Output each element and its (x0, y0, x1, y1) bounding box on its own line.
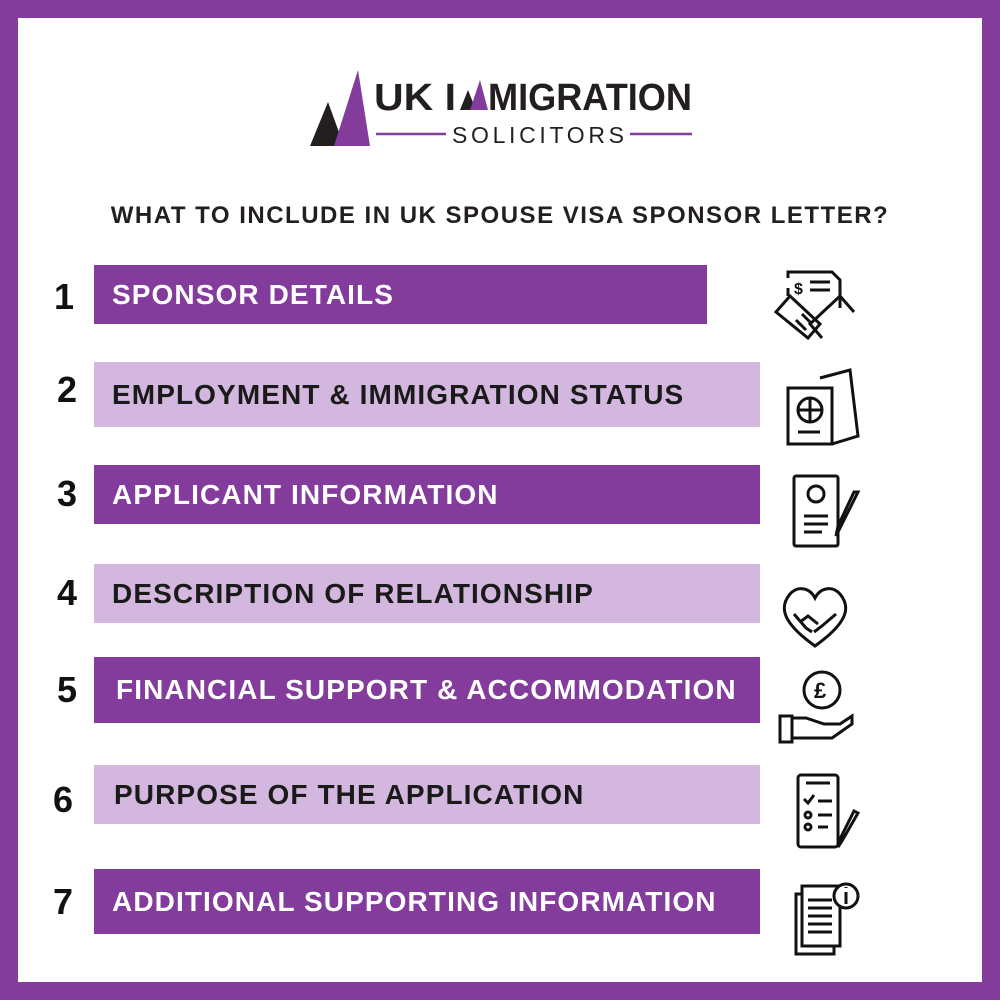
text: ADDITIONAL SUPPORTING INFORMATION (112, 886, 717, 916)
text: 5 (57, 669, 77, 710)
item 5 (57, 657, 760, 723)
icon: hand pound coin (778, 670, 854, 744)
text: APPLICANT INFORMATION (112, 478, 499, 510)
icon: handshake contract: $ (794, 281, 803, 298)
logo: MIGRATION (488, 77, 692, 119)
icon: applicant form (792, 474, 860, 548)
icon: handshake contract (774, 270, 855, 340)
text: EMPLOYMENT & IMMIGRATION STATUS (112, 378, 684, 410)
icon: checklist (796, 774, 860, 848)
item 1 (54, 265, 707, 324)
icon: hand pound coin: £ (814, 678, 827, 703)
item 2 (57, 362, 760, 427)
text: FINANCIAL SUPPORT & ACCOMMODATION (116, 674, 737, 705)
text: 1 (54, 276, 74, 317)
logo: UK I (374, 77, 456, 119)
text: DESCRIPTION OF RELATIONSHIP (112, 578, 594, 608)
logo (310, 70, 692, 146)
text: 3 (57, 473, 77, 514)
text: 6 (53, 779, 73, 820)
icon: heart handshake (782, 587, 848, 648)
text: 4 (57, 572, 77, 613)
icon: passport (786, 368, 860, 446)
item 7 (53, 869, 760, 934)
text: 2 (57, 369, 77, 410)
text: PURPOSE OF THE APPLICATION (114, 778, 584, 810)
item 3 (57, 465, 760, 524)
title: WHAT TO INCLUDE IN UK SPOUSE VISA SPONSOR LETTER? (111, 202, 889, 229)
item 4 (57, 564, 760, 623)
item 6 (53, 765, 760, 824)
text: SPONSOR DETAILS (112, 278, 394, 310)
icon: document info (794, 882, 860, 956)
text: 7 (53, 881, 73, 922)
